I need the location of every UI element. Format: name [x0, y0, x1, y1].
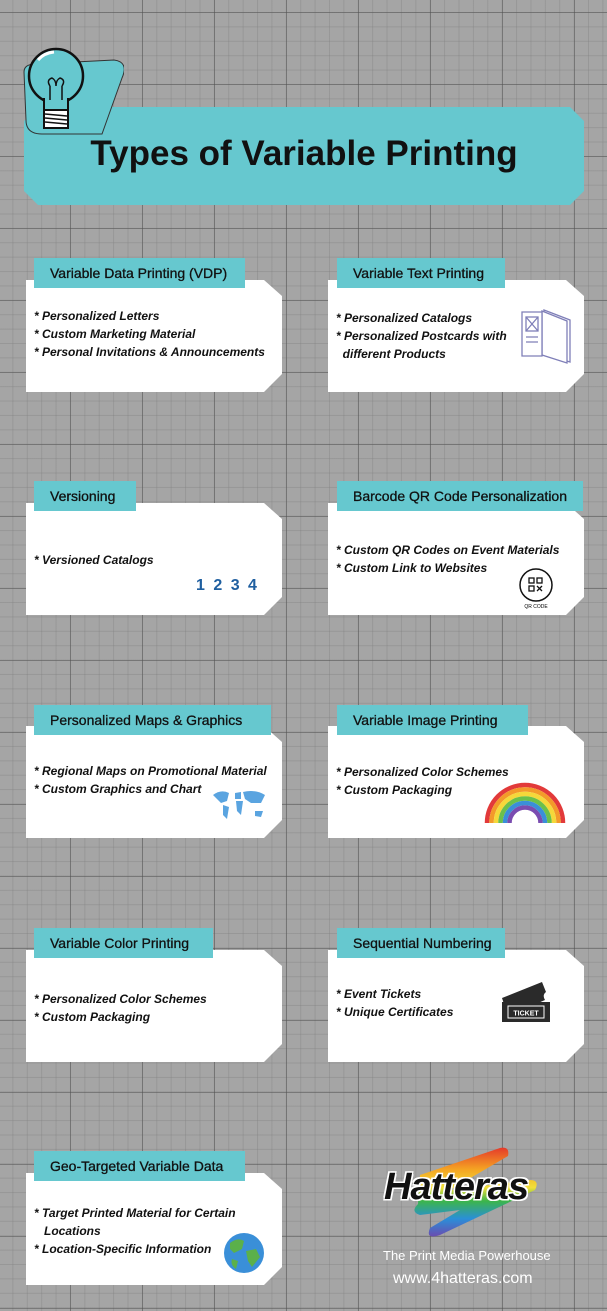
panel: geo-targeted — [26, 1151, 282, 1285]
panel: variable text — [328, 258, 584, 392]
text — [336, 543, 559, 575]
tab — [337, 928, 505, 958]
tab — [337, 705, 528, 735]
text: VDP items: * Custom Marketing Material — [34, 327, 195, 341]
text: * Custom QR Codes on Event Materials — [336, 543, 559, 557]
text: * Versioned Catalogs — [34, 553, 154, 567]
text — [34, 764, 267, 796]
icon: world map — [213, 791, 265, 819]
tagline: The Print Media Powerhouse — [383, 1248, 551, 1263]
tab: Personalized Maps & Graphics — [50, 712, 242, 728]
tab — [337, 258, 505, 288]
panel: versioning — [26, 481, 282, 615]
title: Types of Variable Printing — [90, 134, 518, 173]
header banner — [24, 107, 584, 205]
text: * Personalized Postcards with — [336, 329, 507, 343]
text: * Custom Graphics and Chart — [34, 782, 201, 796]
panel: variable image — [328, 705, 584, 838]
text — [34, 992, 207, 1024]
icon: catalog — [521, 309, 571, 364]
logo: Hatteras — [383, 1148, 551, 1287]
text: * Personalized Color Schemes — [336, 765, 509, 779]
tab: Sequential Numbering — [353, 935, 492, 951]
icon: ticket: TICKET — [513, 1010, 539, 1018]
icon: numbers: 1 2 3 4 — [196, 577, 259, 594]
icon: light bulb — [24, 48, 124, 134]
text: * Custom Packaging — [34, 1010, 150, 1024]
tab: Geo-Targeted Variable Data — [50, 1158, 223, 1174]
panel: sequential numbering — [328, 928, 584, 1062]
tab — [34, 481, 136, 511]
tab: VDP — [34, 258, 245, 288]
text: VDP items: * Personal Invitations & Announcements — [34, 345, 265, 359]
icon: QR code: QR CODE — [524, 604, 548, 610]
text: * Custom Link to Websites — [336, 561, 487, 575]
panel: maps — [26, 705, 282, 838]
logo swoosh — [414, 1148, 537, 1236]
text: different Products — [343, 347, 446, 361]
text: * Target Printed Material for Certain — [34, 1206, 236, 1220]
text — [336, 765, 509, 797]
panel: VDP — [26, 258, 282, 392]
text: * Location-Specific Information — [34, 1242, 211, 1256]
text: * Unique Certificates — [336, 1005, 453, 1019]
tab — [34, 928, 213, 958]
text: * Personalized Color Schemes — [34, 992, 207, 1006]
text — [34, 1206, 236, 1256]
icon: ticket — [502, 982, 550, 1022]
tab: Variable Image Printing — [353, 712, 497, 728]
text: VDP items: * Personalized Letters — [34, 309, 159, 323]
tab — [34, 705, 271, 735]
text — [336, 311, 507, 361]
tab: VDP: Variable Data Printing (VDP) — [50, 265, 227, 281]
tab: Versioning — [50, 488, 115, 504]
tab: Barcode QR Code Personalization — [353, 488, 567, 504]
text — [336, 987, 453, 1019]
tab: Variable Color Printing — [50, 935, 189, 951]
text: * Personalized Catalogs — [336, 311, 472, 325]
text: Locations — [44, 1224, 101, 1238]
text: * Custom Packaging — [336, 783, 452, 797]
logo text: Hatteras — [384, 1166, 528, 1208]
text: VDP items — [34, 309, 265, 359]
website: www.4hatteras.com — [393, 1270, 533, 1287]
tab: Variable Text Printing — [353, 265, 484, 281]
tab — [34, 1151, 245, 1181]
text: * Regional Maps on Promotional Material — [34, 764, 267, 778]
panel: barcode QR — [328, 481, 584, 615]
panel: variable color — [26, 928, 282, 1062]
tab — [337, 481, 583, 511]
icon: globe — [224, 1233, 264, 1273]
text: * Event Tickets — [336, 987, 421, 1001]
icon: QR code — [519, 568, 553, 610]
icon: rainbow — [484, 782, 566, 823]
